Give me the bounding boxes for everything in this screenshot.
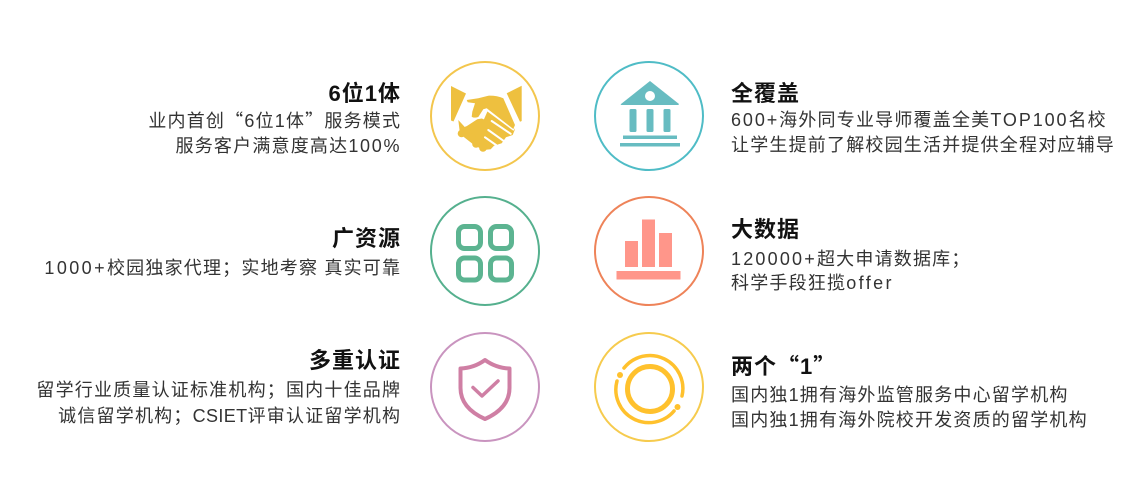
heading: 多重认证: 多重认证	[309, 348, 401, 373]
panel: 大数据 text	[731, 217, 971, 293]
text: 全覆盖 description: 让学生提前了解校园生活并提供全程对应辅导	[731, 135, 1115, 155]
text: 6位1体 description	[148, 107, 401, 156]
text: 大数据 description: 科学手段狂揽offer	[731, 273, 894, 293]
text: 广资源 description: 1000+校园独家代理；实地考察 真实可靠	[44, 258, 401, 278]
icon: university building	[595, 62, 703, 170]
text: 两个1 description	[731, 385, 1088, 430]
text: 多重认证 description: 留学行业质量认证标准机构；国内十佳品牌	[36, 380, 401, 400]
icon: handshake	[431, 62, 539, 170]
heading: 大数据: 大数据	[731, 217, 800, 242]
text: 两个1 description: 国内独1拥有海外监管服务中心留学机构	[731, 385, 1069, 405]
heading: 广资源: 广资源	[332, 226, 401, 251]
panel: 广资源 text	[44, 226, 401, 278]
text: 多重认证 description: 诚信留学机构；CSIET评审认证留学机构	[58, 406, 401, 426]
text: 多重认证 description	[36, 380, 401, 426]
text: 6位1体 description: 服务客户满意度高达100%	[176, 136, 401, 156]
icon: concentric rings	[595, 333, 703, 441]
text: 6位1体 description: 业内首创“6位1体”服务模式	[148, 107, 401, 133]
icon: bar chart	[595, 197, 703, 305]
text: 全覆盖 description	[731, 110, 1115, 155]
text: 全覆盖 description: 600+海外同专业导师覆盖全美TOP100名校	[731, 110, 1107, 130]
icon: four rounded squares	[431, 197, 539, 305]
panel: 多重认证 text	[36, 348, 401, 426]
heading: 6位1体: 6位1体	[329, 81, 401, 106]
panel: 全覆盖 text	[731, 81, 1115, 155]
text: 大数据 description	[731, 249, 971, 293]
panel: 两个1 text	[731, 349, 1088, 430]
heading: 全覆盖: 全覆盖	[731, 81, 800, 106]
text: 大数据 description: 120000+超大申请数据库；	[731, 249, 971, 269]
heading: 两个“1”: 两个“1”	[731, 349, 836, 381]
panel: 6位1体 text	[148, 81, 401, 156]
text: 两个1 description: 国内独1拥有海外院校开发资质的留学机构	[731, 410, 1088, 430]
icon: shield with check	[431, 333, 539, 441]
